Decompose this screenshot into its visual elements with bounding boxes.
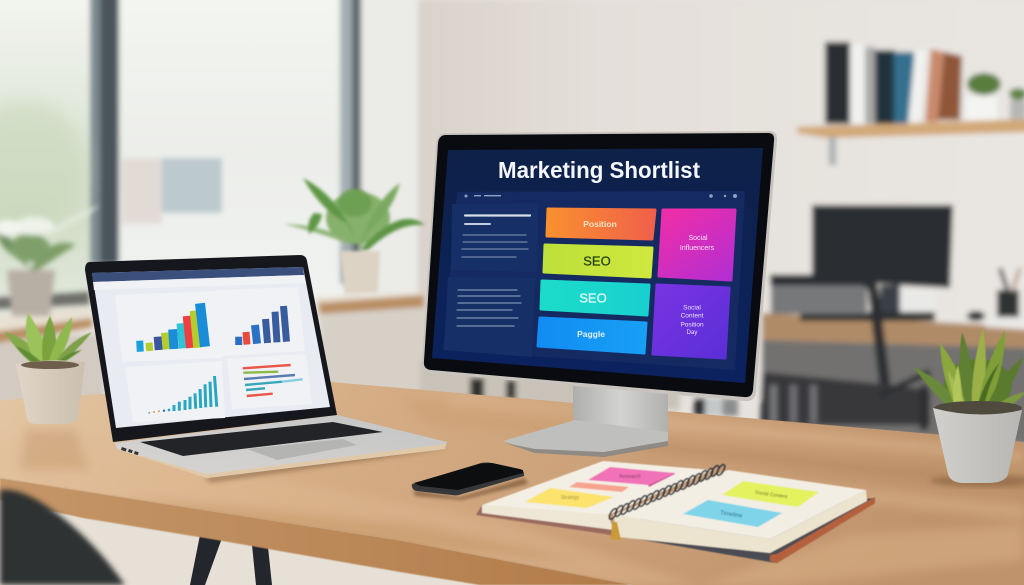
foliage <box>0 205 100 270</box>
touchpad <box>247 439 357 460</box>
plant on desk left <box>5 313 92 424</box>
sill wood edge <box>318 295 424 314</box>
wood grain <box>0 395 1024 585</box>
light window reveal <box>361 0 418 296</box>
neck <box>573 386 668 440</box>
cover corner <box>770 497 875 563</box>
items behind monitor <box>470 378 738 416</box>
desk top surface <box>0 381 1024 585</box>
leaves <box>5 313 92 370</box>
tile: magenta: Social <box>688 235 708 242</box>
tile: purple: Position <box>680 322 704 328</box>
phone <box>412 462 528 500</box>
sticky: pink: Research <box>619 474 641 480</box>
laptop lid <box>85 255 337 442</box>
floor below desk <box>0 480 640 585</box>
laptop shadow <box>205 448 450 482</box>
centre window glass <box>116 0 344 314</box>
pot rim shadow <box>934 401 1022 415</box>
sticky: lime <box>722 481 819 507</box>
lower text panel <box>444 277 535 357</box>
window plant left <box>0 205 100 316</box>
spiral binding <box>608 464 726 520</box>
sticky: pink <box>588 467 675 487</box>
base shadow <box>505 441 668 457</box>
tile: blue: Paggle <box>577 329 605 339</box>
tile: lime: SEO <box>583 254 611 268</box>
bullet list lines <box>457 290 521 326</box>
right cover <box>620 498 875 563</box>
sticky: salmon <box>569 482 629 492</box>
background bookshelf <box>797 42 1024 165</box>
background monitor <box>812 205 953 315</box>
laptop screen <box>92 267 330 428</box>
keyboard and mouse on back desk <box>800 311 985 321</box>
screen title: Marketing Shortlist <box>498 157 700 183</box>
pot rim shadow <box>21 361 79 369</box>
window sill left <box>0 306 92 345</box>
plant on desk right <box>913 328 1024 487</box>
laptop base <box>115 415 447 478</box>
title bar <box>92 267 304 282</box>
wall behind monitor base <box>420 360 680 410</box>
right page block <box>613 490 867 553</box>
tile: magenta: Influencers <box>680 245 715 252</box>
laptop <box>85 255 450 482</box>
tile: orange <box>547 209 655 239</box>
pot <box>7 270 55 316</box>
blurred foliage outside <box>0 100 87 240</box>
sticky: yellow <box>525 488 614 508</box>
chart cards <box>115 287 312 422</box>
phone shadow <box>413 478 528 500</box>
leaves <box>913 328 1024 414</box>
pot <box>933 408 1022 483</box>
bezel <box>424 133 774 397</box>
blurred building window <box>122 158 222 224</box>
monitor <box>422 131 777 401</box>
toolbar <box>93 275 306 290</box>
pot <box>16 360 85 424</box>
chair body <box>760 278 930 430</box>
paper on back desk <box>985 318 1024 330</box>
lower wall left <box>0 335 104 405</box>
tile: teal <box>541 281 649 315</box>
left window glass <box>0 0 94 314</box>
background room <box>0 0 1024 445</box>
dark sill track <box>0 291 90 310</box>
window frame right <box>340 0 361 284</box>
window sill right <box>315 293 424 314</box>
keyboard <box>140 422 383 456</box>
left cover <box>476 505 620 537</box>
notebook <box>476 461 875 563</box>
chair foreground <box>0 490 125 585</box>
bar chart: navy <box>239 306 286 345</box>
sticky: blue <box>683 500 782 527</box>
right page <box>613 470 866 539</box>
left sill wood edge <box>0 318 92 344</box>
dashboard panel <box>443 191 745 370</box>
tile: orange: Position <box>583 219 617 229</box>
sticky: yellow: Strategy <box>561 495 580 501</box>
back wall <box>415 0 1024 400</box>
pot <box>340 251 380 293</box>
tile: purple: Content <box>681 312 704 320</box>
window mullion left <box>90 0 119 264</box>
panel text lines <box>462 216 530 257</box>
tile: lime <box>544 245 652 277</box>
tile: purple: Social <box>683 304 701 312</box>
phone screen <box>414 463 523 490</box>
bezel edge <box>422 131 777 401</box>
phone body <box>412 462 524 495</box>
base front rim <box>117 444 445 478</box>
sticky: blue: Timeline <box>720 510 743 520</box>
ports <box>121 447 139 455</box>
sticky: lime: Social Content <box>755 490 788 500</box>
screen <box>432 148 763 383</box>
tile: magenta <box>659 210 735 280</box>
rising teal bar chart <box>148 376 217 414</box>
ribbon <box>611 522 621 540</box>
upper text panel <box>451 203 538 272</box>
tile: purple <box>653 285 729 358</box>
desk legs <box>190 535 272 585</box>
bar chart: multicolour <box>140 303 205 352</box>
tile: blue <box>538 318 646 353</box>
pencil cup <box>997 268 1020 317</box>
tile: purple: Day <box>687 330 697 336</box>
horizontal bar chart <box>243 365 303 396</box>
panel top bar icons <box>464 194 737 198</box>
desk <box>0 381 1024 585</box>
under back desk cabinet <box>762 340 1024 445</box>
lower wall under sill <box>320 305 450 395</box>
back desk <box>762 313 1024 348</box>
tile: teal: SEO <box>579 290 607 306</box>
foliage <box>284 178 425 252</box>
monitor stand <box>503 386 668 457</box>
desk front edge <box>0 478 633 585</box>
left page <box>482 461 712 515</box>
window plant right <box>284 178 425 293</box>
base <box>503 420 668 456</box>
left page block <box>482 505 614 530</box>
pot shadow <box>930 475 1024 487</box>
